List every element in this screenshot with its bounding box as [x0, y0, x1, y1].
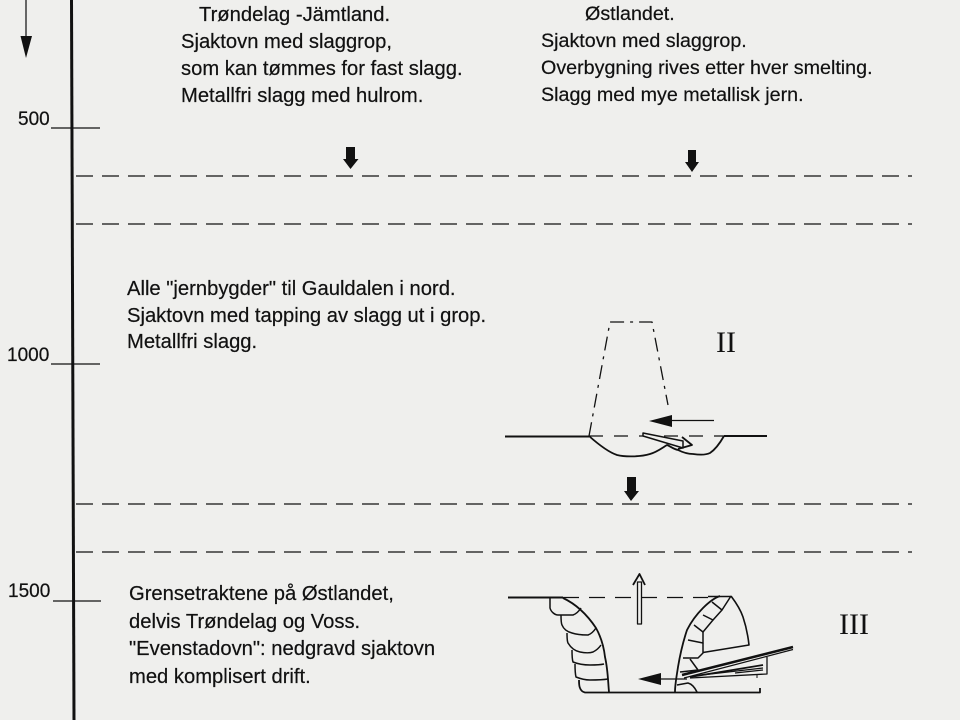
label 500: 500: [18, 109, 50, 130]
period boundary dashed lines upper: [76, 176, 912, 224]
text: Trøndelag-Jämtland: [181, 4, 463, 107]
text: Østlandet: Slagg med mye metallisk jern.: [541, 84, 804, 106]
numeral II: II: [716, 326, 736, 359]
numeral III: III: [839, 608, 869, 641]
text: Grensetraktene: delvis Trøndelag og Voss.: [129, 610, 360, 632]
tick 1000: [51, 363, 100, 365]
furnace diagram III: [508, 596, 793, 692]
tick 500: [51, 127, 100, 129]
text: Trøndelag-Jämtland: Metallfri slagg med hulrom.: [181, 85, 423, 107]
text: Østlandet: Sjaktovn med slaggrop.: [541, 30, 747, 52]
text: jernbygder: Metallfri slagg.: [127, 331, 257, 353]
small down arrow left: [343, 147, 358, 169]
text: Grensetraktene: [129, 583, 435, 688]
text: Grensetraktene: Grensetraktene på Østlandet,: [129, 583, 394, 605]
time direction arrow: [20, 0, 32, 58]
timeline axis: [72, 0, 74, 720]
hollow up arrow: [633, 574, 645, 624]
text: Trøndelag-Jämtland: Trøndelag -Jämtland.: [199, 4, 390, 26]
text: jernbygder: Sjaktovn med tapping av slagg ut i grop.: [127, 304, 486, 326]
text: jernbygder: [126, 278, 486, 353]
text: Østlandet: Østlandet.: [585, 3, 675, 25]
text: Trøndelag-Jämtland: Sjaktovn med slaggrop,: [181, 31, 392, 53]
period boundary dashed lines lower: [76, 504, 912, 552]
text: Grensetraktene: "Evenstadovn": nedgravd sjaktovn: [129, 638, 435, 660]
furnace diagram II: [505, 322, 767, 456]
text: Trøndelag-Jämtland: som kan tømmes for fast slagg.: [181, 58, 463, 80]
text: Østlandet: [541, 3, 873, 106]
small down arrow right: [685, 150, 699, 172]
label 1000: 1000: [7, 345, 49, 366]
text: Østlandet: Overbygning rives etter hver smelting.: [541, 57, 873, 79]
text: jernbygder: Alle "jernbygder" til Gauldalen i nord.: [127, 278, 456, 300]
tick 1500: [53, 600, 101, 602]
text: Grensetraktene: med komplisert drift.: [129, 666, 311, 688]
label 1500: 1500: [8, 581, 50, 602]
small down arrow centre: [624, 477, 639, 501]
